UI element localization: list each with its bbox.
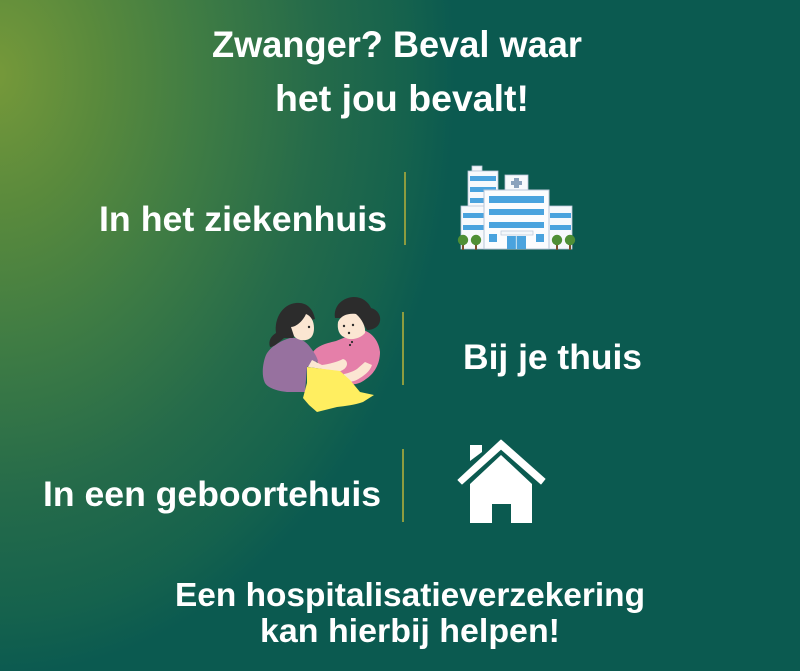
pregnant woman arm: [344, 362, 372, 382]
title: het jou bevalt!: [275, 78, 529, 119]
divider: thuis: [402, 312, 404, 385]
illustration: midwife with pregnant woman: [263, 297, 380, 412]
closing message: [175, 576, 645, 649]
pregnant woman hair: [335, 297, 380, 330]
divider: ziekenhuis: [404, 172, 406, 245]
label: bij je thuis: Bij je thuis: [463, 338, 642, 377]
yellow blanket: [303, 367, 374, 412]
midwife arm: [308, 359, 347, 371]
closing message: Een hospitalisatieverzekering: [175, 576, 645, 613]
pregnant woman body: [313, 330, 380, 384]
label: in het ziekenhuis: In het ziekenhuis: [99, 200, 387, 239]
pregnant woman face: [338, 314, 365, 339]
midwife face: [291, 314, 314, 340]
title: [212, 24, 582, 119]
icon: house: [458, 440, 545, 523]
title: Zwanger? Beval waar: [212, 24, 582, 65]
midwife hair: [269, 303, 315, 347]
closing message: kan hierbij helpen!: [260, 612, 560, 649]
facial details: [308, 324, 354, 346]
midwife body: [263, 338, 318, 392]
icon: hospital: [458, 166, 575, 250]
label: in een geboortehuis: In een geboortehuis: [43, 475, 381, 514]
divider: geboortehuis: [402, 449, 404, 522]
